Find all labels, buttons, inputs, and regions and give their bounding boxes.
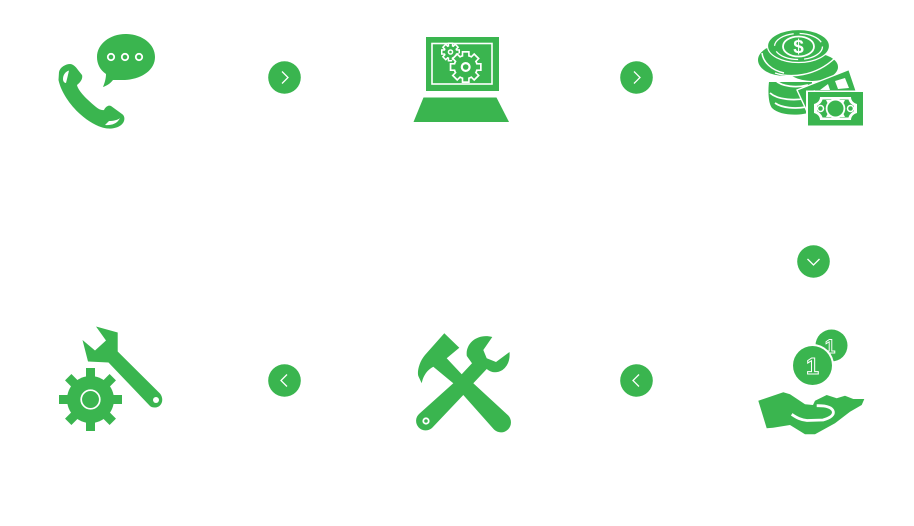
icon: coins and banknotes bbox=[758, 30, 864, 126]
small gear bbox=[441, 42, 460, 62]
small coin: 1 bbox=[825, 337, 836, 358]
icon: hand receiving coins bbox=[758, 330, 864, 434]
crossed tools silhouette bbox=[416, 333, 511, 432]
telephone handset bbox=[58, 64, 124, 129]
spanner hole bbox=[153, 397, 159, 403]
arrow: down, step 3 to 4 bbox=[797, 245, 830, 278]
arrow: right, step 2 to 3 bbox=[620, 61, 653, 94]
arrow: left, step 5 to 6 bbox=[268, 364, 301, 397]
gear bbox=[59, 368, 122, 431]
rear banknote bbox=[797, 70, 861, 118]
spanner bbox=[82, 326, 162, 408]
open hand bbox=[758, 392, 864, 434]
laptop keyboard base bbox=[414, 98, 509, 122]
top dollar coin: $ bbox=[793, 37, 804, 58]
speech bubble bbox=[97, 34, 155, 87]
icon: gear and spanner bbox=[59, 326, 162, 431]
arrow: right, step 1 to 2 bbox=[268, 61, 301, 94]
icon: phone with speech bubble bbox=[58, 34, 155, 129]
right coin edge bbox=[786, 53, 838, 81]
lower coin stack bbox=[768, 80, 812, 115]
large coin: 1 bbox=[806, 353, 819, 379]
large gear bbox=[450, 51, 482, 83]
arrow: left, step 4 to 5 bbox=[620, 364, 653, 397]
front banknote bbox=[806, 90, 864, 126]
screen inner border bbox=[432, 44, 492, 84]
left coin bbox=[758, 44, 812, 76]
handle hole bbox=[423, 418, 429, 424]
icon: laptop with gears bbox=[414, 37, 509, 122]
icon: crossed hammer and wrench bbox=[416, 333, 511, 432]
laptop screen bbox=[426, 37, 499, 91]
